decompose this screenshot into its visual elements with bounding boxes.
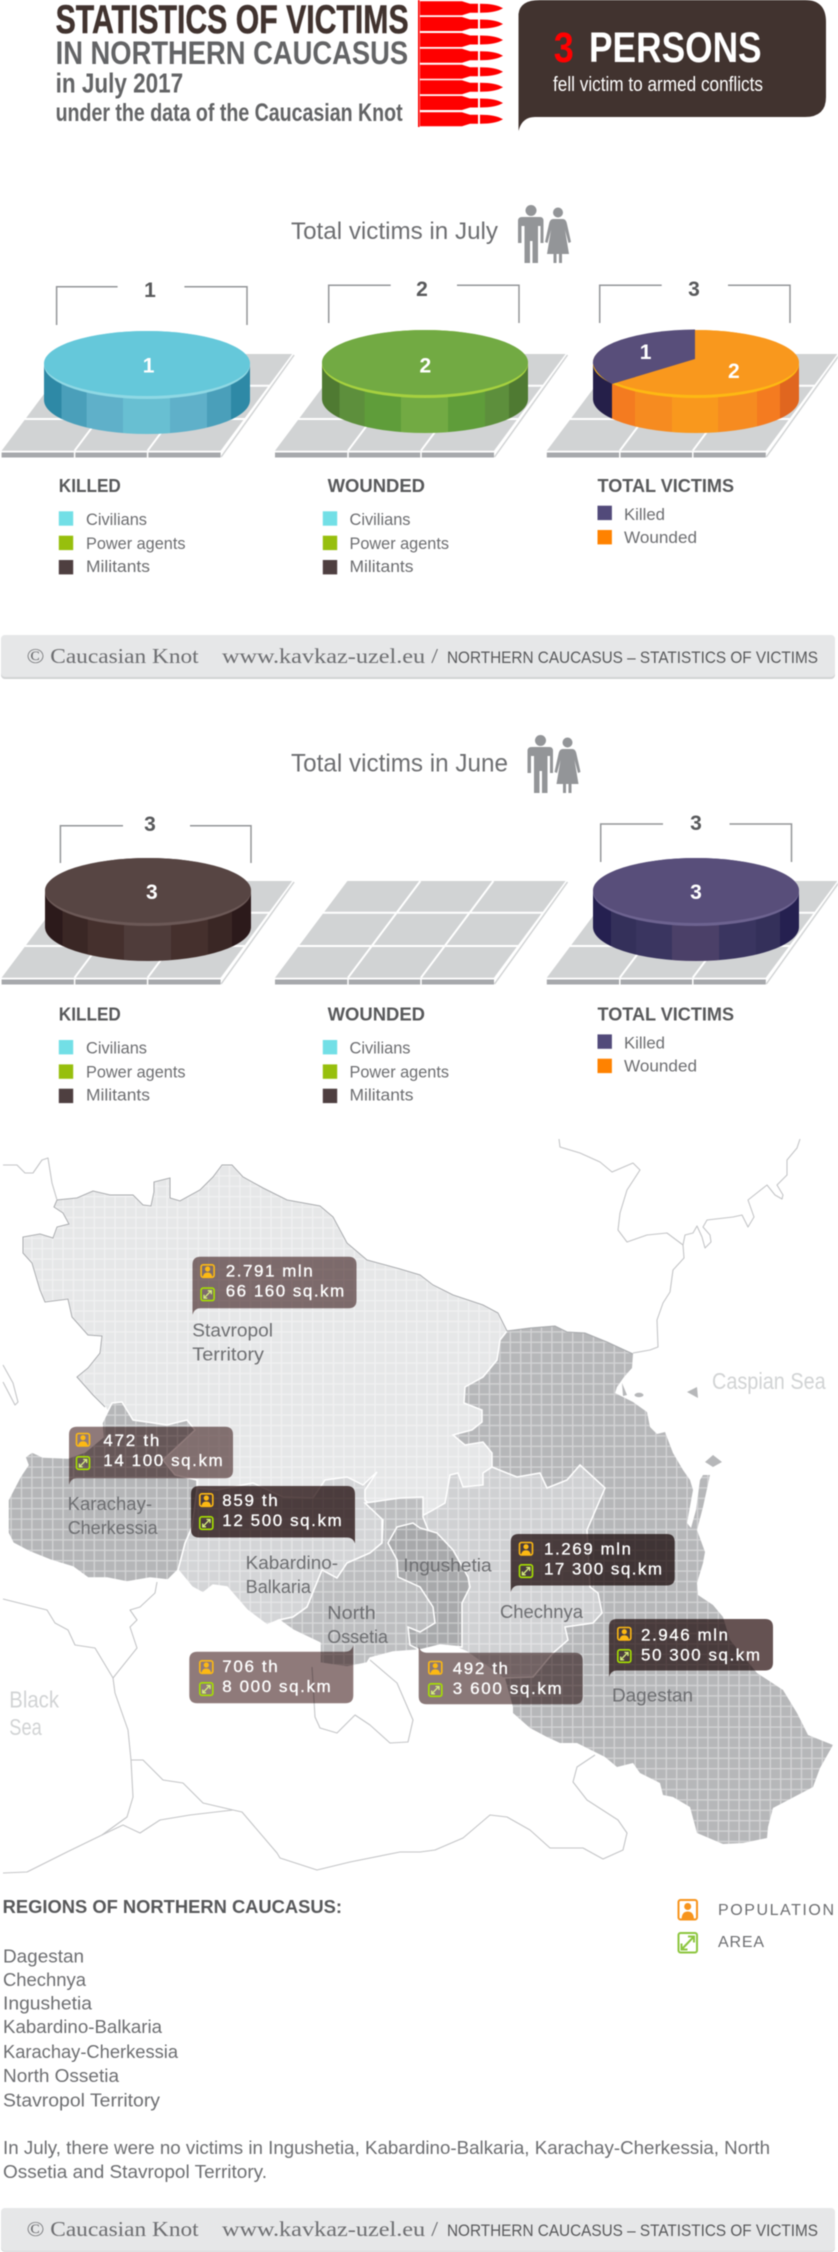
callout: Stavropol figures: 66 160 sq.km xyxy=(226,1282,344,1301)
legend heading: TOTAL VICTIMS xyxy=(598,1005,734,1025)
callout: Chechnya figures: 17 300 sq.km xyxy=(544,1560,662,1579)
regions list xyxy=(3,1947,179,2111)
legend: July total: Wounded xyxy=(624,529,697,547)
callout: Kabardino-Balkaria figures xyxy=(191,1486,355,1544)
callout: North Ossetia figures xyxy=(189,1645,353,1703)
callout: Ingushetia figures xyxy=(419,1647,583,1704)
orange slice xyxy=(593,330,799,395)
neighbouring borders xyxy=(3,1139,800,1873)
callout: Chechnya figures: 1.269 mln xyxy=(544,1540,631,1559)
icon: population xyxy=(678,1900,697,1920)
map legend xyxy=(678,1900,834,1952)
legend: July total: Killed xyxy=(624,506,665,524)
footer bar 2: www.kavkaz-uzel.eu / xyxy=(222,2217,438,2241)
legend heading: WOUNDED xyxy=(328,1005,425,1025)
callout: Dagestan figures: 50 300 sq.km xyxy=(641,1646,760,1665)
label: North Ossetia: Ossetia xyxy=(327,1627,389,1647)
bracket value: 3 xyxy=(688,278,700,301)
pie rim xyxy=(45,858,251,926)
title line 2: IN NORTHERN CAUCASUS xyxy=(56,35,408,71)
bracket xyxy=(601,824,792,862)
legend: June killed: Militants xyxy=(86,1087,150,1105)
legend heading: WOUNDED xyxy=(328,476,425,496)
panel: July total pie xyxy=(547,278,838,458)
pie value: 1 xyxy=(143,354,155,378)
regions list: Dagestan xyxy=(3,1947,84,1967)
footer bar 2: © Caucasian Knot xyxy=(27,2217,199,2241)
label: North Ossetia: North xyxy=(327,1603,376,1623)
regions list: Stavropol Territory xyxy=(3,2091,160,2111)
label: Stavropol Territory: Stavropol xyxy=(192,1321,273,1341)
slice value wounded: 2 xyxy=(728,360,740,383)
pie value: 2 xyxy=(420,354,431,378)
legend: June killed: Civilians xyxy=(86,1040,147,1058)
label: area: AREA xyxy=(718,1934,764,1951)
legend heading: KILLED xyxy=(59,476,121,496)
legend: June killed: Power agents xyxy=(86,1064,186,1082)
panel: June total pie xyxy=(547,812,838,985)
heading: regions of Northern Caucasus: REGIONS OF NORTHERN CAUCASUS: xyxy=(3,1897,342,1917)
pie side xyxy=(592,365,800,434)
regions list: Karachay-Cherkessia xyxy=(3,2042,179,2062)
outer region border xyxy=(23,1165,633,1407)
label: Dagestan: Dagestan xyxy=(612,1686,693,1706)
callout subtext: fell victim to armed conflicts xyxy=(553,74,763,96)
label: Black Sea: Sea xyxy=(9,1714,42,1740)
floor grid xyxy=(2,354,294,458)
regions list: Chechnya xyxy=(3,1970,87,1990)
label: Chechnya: Chechnya xyxy=(500,1602,584,1622)
legend: June killed xyxy=(59,1005,185,1105)
persons word: PERSONS xyxy=(589,24,762,72)
legend: July wounded: Militants xyxy=(350,558,414,576)
pie value: 3 xyxy=(690,881,702,904)
pie top xyxy=(593,858,799,923)
label: North Ossetia xyxy=(327,1603,389,1647)
label: Karachay-Cherkessia: Cherkessia xyxy=(68,1518,159,1538)
label: Black Sea xyxy=(9,1687,59,1740)
region: Chechnya xyxy=(400,1455,605,1678)
floor grid xyxy=(547,354,838,458)
icon: people xyxy=(518,205,571,263)
footer bar 1: © Caucasian Knot xyxy=(27,644,199,668)
slice value killed: 1 xyxy=(640,341,652,364)
legend: June total: Killed xyxy=(624,1035,665,1053)
callout: Ingushetia figures: 492 th xyxy=(453,1659,508,1678)
region: Stavropol Territory xyxy=(23,1165,507,1550)
legend: July killed: Militants xyxy=(86,558,150,576)
purple slice xyxy=(593,330,695,384)
callout: Ingushetia figures: 3 600 sq.km xyxy=(453,1679,562,1698)
callout: Kabardino-Balkaria figures: 12 500 sq.km xyxy=(222,1511,342,1530)
callout: Dagestan figures: 2.946 mln xyxy=(641,1626,728,1645)
heading: total victims in June: Total victims in June xyxy=(291,750,508,778)
footer bar 2 xyxy=(1,2208,835,2252)
note paragraph xyxy=(3,2138,770,2182)
label: Ingushetia: Ingushetia xyxy=(403,1556,493,1576)
pie rim xyxy=(322,330,528,398)
legend: July total xyxy=(598,476,734,547)
label: Karachay-Cherkessia xyxy=(68,1494,159,1538)
legend: June wounded: Militants xyxy=(350,1087,414,1105)
bracket value: 2 xyxy=(416,278,428,301)
title line 3: in July 2017 xyxy=(56,68,183,98)
pie side xyxy=(592,893,800,962)
bracket value: 1 xyxy=(144,279,156,302)
bracket value: 3 xyxy=(144,813,156,836)
legend heading: KILLED xyxy=(59,1005,121,1025)
pie rim xyxy=(593,858,799,926)
islands xyxy=(622,1383,722,1467)
pie top xyxy=(322,330,528,395)
label: Stavropol Territory xyxy=(192,1321,273,1365)
legend: July wounded xyxy=(323,476,449,576)
icon: area xyxy=(678,1933,697,1952)
floor grid xyxy=(2,881,294,985)
panel: June wounded empty floor xyxy=(275,881,568,985)
legend: June total xyxy=(598,1005,734,1076)
callout: Kabardino-Balkaria figures: 859 th xyxy=(222,1491,278,1510)
region: Ingushetia xyxy=(388,1523,470,1650)
region labels xyxy=(9,1321,826,1740)
callout: Chechnya figures xyxy=(511,1534,675,1592)
label: Kabardino-Balkaria xyxy=(246,1553,338,1597)
legend: July wounded: Civilians xyxy=(350,511,410,529)
map of Northern Caucasus xyxy=(3,1139,833,1873)
regions list: Kabardino-Balkaria xyxy=(3,2017,163,2037)
legend: July killed xyxy=(59,476,185,576)
bracket xyxy=(600,285,790,323)
label: population: POPULATION xyxy=(718,1902,834,1919)
callout: North Ossetia figures: 8 000 sq.km xyxy=(222,1677,331,1696)
label: Stavropol Territory: Territory xyxy=(192,1345,264,1365)
note paragraph: Ossetia and Stavropol Territory. xyxy=(3,2162,267,2182)
callout: Dagestan figures xyxy=(609,1619,773,1677)
header title block xyxy=(56,0,409,127)
region: North Ossetia xyxy=(279,1497,440,1667)
icon: people June xyxy=(528,735,580,793)
legend: July wounded: Power agents xyxy=(350,535,449,553)
title line 4: under the data of the Caucasian Knot xyxy=(56,99,403,127)
callout: 3 persons xyxy=(518,0,826,131)
legend: July killed: Power agents xyxy=(86,535,186,553)
footer bar 1: www.kavkaz-uzel.eu / xyxy=(222,644,438,668)
panel: June killed pie xyxy=(2,813,294,985)
pie top xyxy=(45,858,251,923)
legend: June wounded: Civilians xyxy=(350,1040,410,1058)
callout bubble xyxy=(518,0,826,131)
label: Kabardino-Balkaria: Kabardino- xyxy=(246,1553,338,1573)
pie side xyxy=(321,365,529,434)
region: Karachay-Cherkessia xyxy=(8,1402,197,1582)
pie side xyxy=(43,366,251,435)
regions list: North Ossetia xyxy=(3,2066,120,2086)
red number: 3 xyxy=(554,24,574,72)
legend: June total: Wounded xyxy=(624,1058,697,1076)
note paragraph: In July, there were no victims in Ingushetia, Kabardino-Balkaria, Karachay-Cherkessia, North xyxy=(3,2138,770,2158)
legend: July killed: Civilians xyxy=(86,511,147,529)
icon: row of red bullets xyxy=(418,0,503,127)
callout: Karachay-Cherkessia figures xyxy=(69,1427,233,1485)
label: Karachay-Cherkessia: Karachay- xyxy=(68,1494,152,1514)
callout: Stavropol figures: 2.791 mln xyxy=(226,1262,313,1281)
region: Dagestan xyxy=(440,1326,833,1844)
footer bar 1 xyxy=(1,635,835,679)
pie rim xyxy=(593,330,799,398)
bracket xyxy=(57,287,247,325)
legend: June wounded: Power agents xyxy=(350,1064,449,1082)
region: Kabardino-Balkaria xyxy=(178,1472,382,1625)
pie value: 3 xyxy=(146,881,158,904)
callout: Karachay-Cherkessia figures: 14 100 sq.km xyxy=(103,1451,223,1470)
pie top xyxy=(44,331,250,396)
callout: Stavropol figures xyxy=(192,1257,356,1315)
panel: July killed pie xyxy=(2,279,294,458)
bracket value: 3 xyxy=(690,812,702,835)
legend heading: TOTAL VICTIMS xyxy=(598,476,734,496)
label: Kabardino-Balkaria: Balkaria xyxy=(246,1577,312,1597)
floor grid xyxy=(547,881,838,985)
heading: total victims in July: Total victims in July xyxy=(291,218,498,245)
panel: July wounded pie xyxy=(275,278,568,458)
regions list: Ingushetia xyxy=(3,1993,93,2013)
legend: June wounded xyxy=(323,1005,449,1105)
bracket xyxy=(60,826,251,863)
pie side xyxy=(44,893,252,962)
floor grid xyxy=(275,354,568,458)
callout: North Ossetia figures: 706 th xyxy=(222,1657,278,1676)
label: Black Sea: Black xyxy=(9,1687,59,1713)
callout: Karachay-Cherkessia figures: 472 th xyxy=(103,1431,159,1450)
bracket xyxy=(329,285,519,323)
pie rim xyxy=(44,331,250,399)
